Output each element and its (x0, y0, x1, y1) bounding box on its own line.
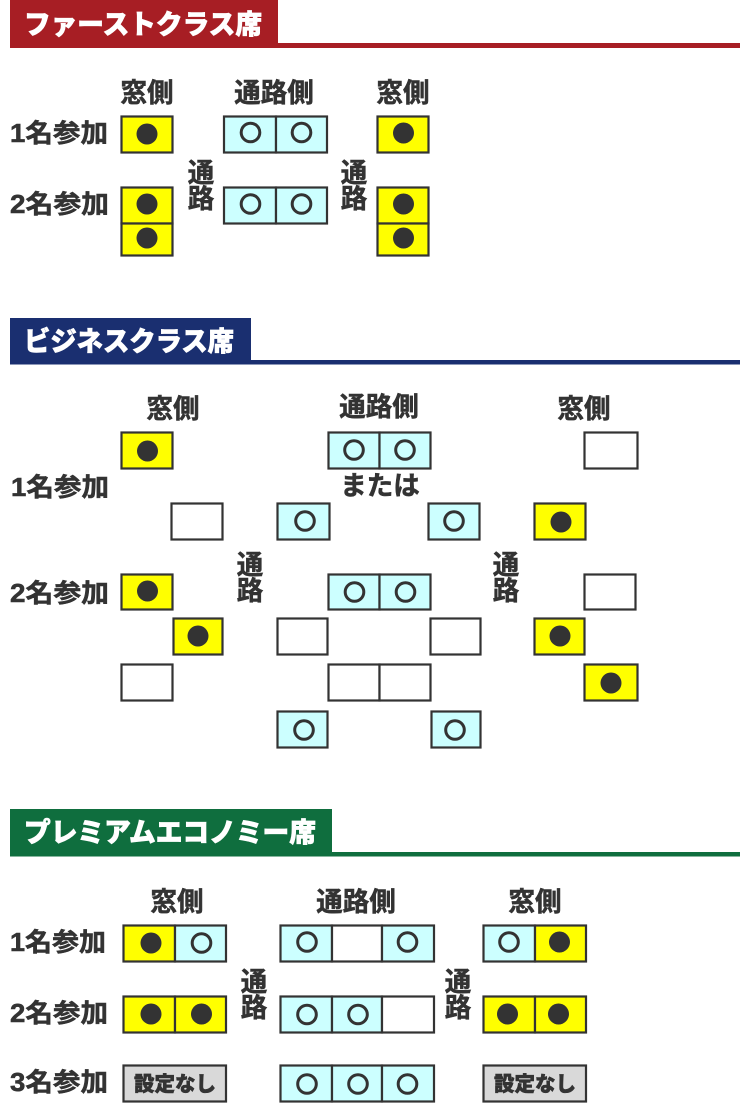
seat: 2 people option A left (122, 574, 172, 610)
row label: 1 person: 1名参加 (10, 120, 108, 148)
panel: business class (10, 318, 740, 748)
aisle label right: 路 (493, 576, 520, 606)
seat: 2 people option B left (174, 618, 222, 654)
aisle label left (237, 550, 264, 606)
seat: 1 person option B center left (278, 504, 330, 540)
aisle label right (445, 967, 472, 1023)
seat: 2 people option B center right (430, 618, 480, 654)
seat: 2 people option D center right (432, 712, 480, 748)
column label: window left: 窓側 (120, 78, 174, 108)
heading: first class: ファーストクラス席 (24, 10, 262, 40)
text: or: または (340, 471, 420, 501)
aisle label left (188, 158, 215, 214)
seats: center 1 person (280, 926, 434, 962)
column label: window right: 窓側 (508, 887, 562, 917)
aisle label right (341, 158, 368, 214)
seats: right 1 person (484, 926, 586, 962)
seats: 1 person option A center (328, 432, 430, 468)
row label: 1 person: 1名参加 (11, 474, 109, 502)
aisle label left: 路 (241, 993, 268, 1023)
heading: first class (10, 0, 740, 48)
heading: premium economy: プレミアムエコノミー席 (24, 818, 316, 848)
seat: 1 person option B right (534, 504, 586, 540)
box: not available right: 設定なし (494, 1073, 576, 1096)
seat: 2 people option B right (534, 618, 584, 654)
seat: 1 person option A right (584, 432, 638, 468)
column label: aisle side: 通路側 (316, 887, 396, 917)
aisle label right (493, 550, 520, 606)
aisle label left: 通 (237, 550, 264, 580)
seats: right 2 people (484, 996, 586, 1032)
aisle label left: 通 (188, 158, 215, 188)
seat: 1 person option B center right (428, 504, 480, 540)
column label: aisle side: 通路側 (339, 392, 419, 422)
seats: 2 people option C center (328, 664, 430, 700)
aisle label right: 路 (341, 184, 368, 214)
column label: aisle side: 通路側 (234, 78, 314, 108)
seat: 2 people option B center left (278, 618, 328, 654)
aisle label right: 通 (493, 550, 520, 580)
seat: 1 person option B left (172, 504, 222, 540)
aisle label left: 路 (237, 576, 264, 606)
panel: premium economy (10, 809, 740, 1102)
seat: right window 1 person (378, 116, 428, 152)
seats: center 2 people (224, 188, 327, 224)
column label: window left: 窓側 (146, 394, 200, 424)
aisle label right: 通 (341, 158, 368, 188)
seat: 2 people option A right (584, 574, 636, 610)
seat: 2 people option C left (122, 664, 172, 700)
column label: window left: 窓側 (150, 887, 204, 917)
aisle label left: 路 (188, 184, 215, 214)
seat: 2 people option D center left (278, 712, 328, 748)
box: not available right (484, 1066, 586, 1102)
row label: 2 people: 2名参加 (10, 1000, 108, 1028)
seats: center 1 person (224, 116, 327, 152)
column label: window right: 窓側 (376, 78, 430, 108)
box: not available left: 設定なし (134, 1073, 216, 1096)
seats: right window 2 people (378, 188, 428, 256)
aisle label right: 通 (445, 967, 472, 997)
seats: left 2 people (124, 996, 226, 1032)
heading: business class: ビジネスクラス席 (24, 326, 234, 357)
row label: 2 people: 2名参加 (10, 580, 109, 608)
seats: left 1 person (124, 926, 226, 962)
heading: premium economy (10, 809, 740, 856)
column label: window right: 窓側 (558, 394, 610, 424)
row label: 3 people: 3名参加 (10, 1069, 108, 1097)
seat: 2 people option C right (584, 664, 638, 700)
seat: left window 1 person (122, 116, 172, 152)
seats: center 3 people (280, 1066, 434, 1102)
box: not available left (124, 1066, 226, 1102)
seats: center 2 people (280, 996, 434, 1032)
heading: business class (10, 318, 740, 364)
row label: 2 people: 2名参加 (10, 191, 109, 219)
seat: 1 person option A left (122, 432, 172, 468)
panel: first class (10, 0, 740, 256)
aisle label left (241, 967, 268, 1023)
seats: left window 2 people (122, 188, 172, 256)
row label: 1 person: 1名参加 (10, 929, 106, 957)
aisle label right: 路 (445, 993, 472, 1023)
seats: 2 people option A center (328, 574, 430, 610)
aisle label left: 通 (241, 967, 268, 997)
